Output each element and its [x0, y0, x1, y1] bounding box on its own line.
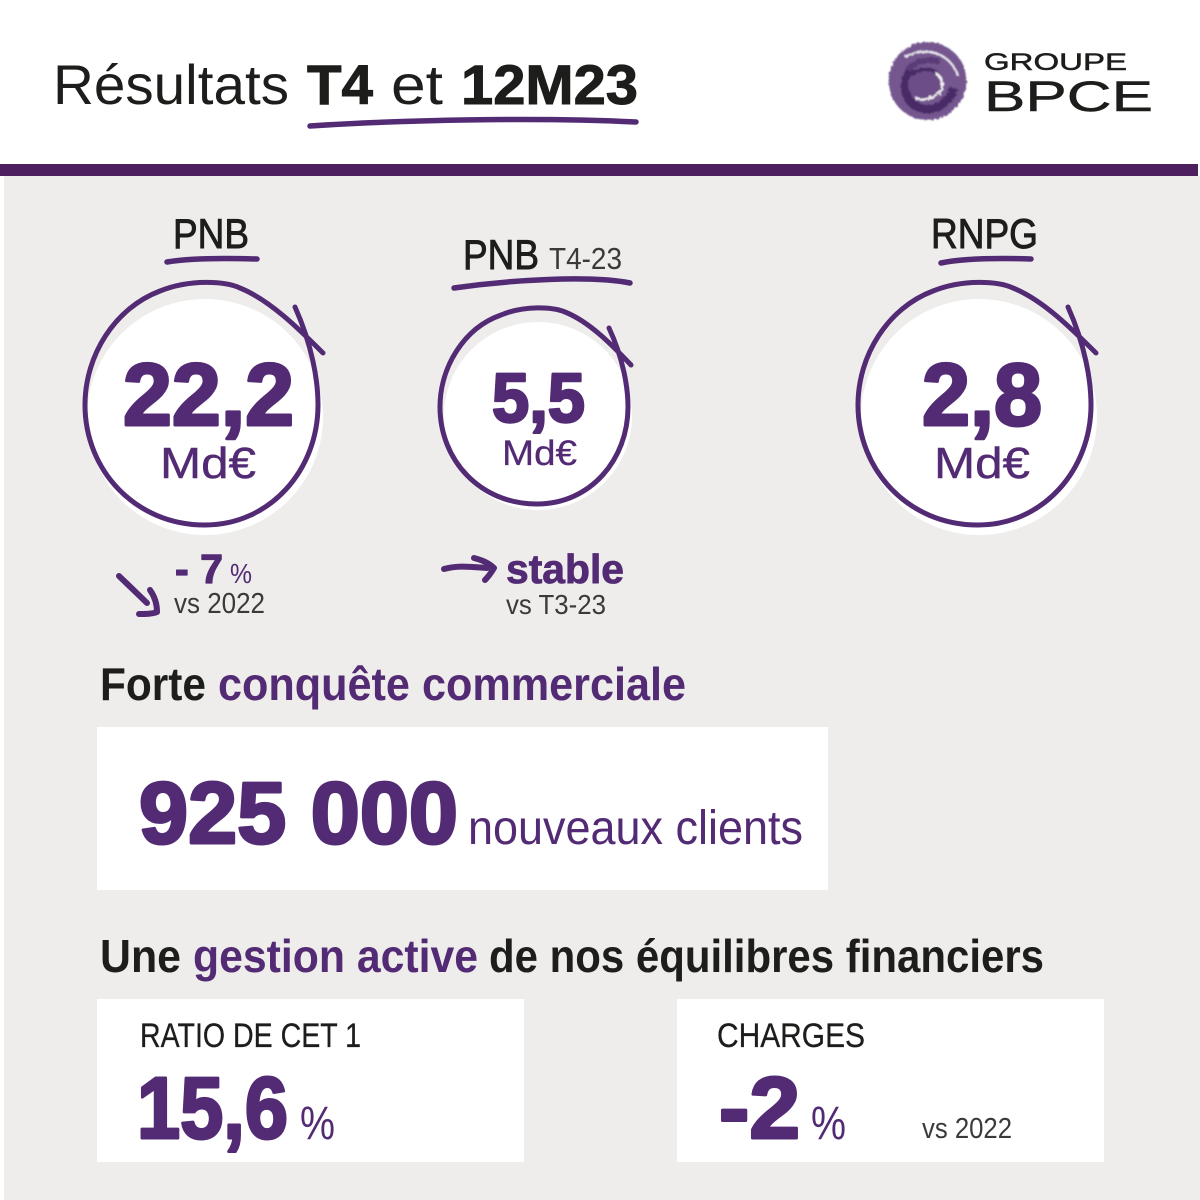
title	[53, 53, 638, 126]
change: -7 % vs 2022	[119, 546, 265, 620]
title: 12M23	[461, 53, 638, 116]
heading: Une gestion active: de nos équilibres financiers	[489, 930, 1044, 982]
circle: 5,5 Md€: Md€	[502, 434, 577, 473]
title: T4	[307, 53, 373, 116]
title: Résultats	[53, 53, 289, 116]
panel: RNPG	[858, 210, 1097, 535]
heading: PNB T4-23: T4-23	[549, 241, 622, 276]
panel: charges: vs 2022	[922, 1113, 1012, 1145]
change: stable vs T3-23	[444, 546, 624, 620]
circle: 5,5 Md€: 5,5	[492, 359, 585, 437]
circle: 2,8 Md€	[858, 282, 1097, 535]
heading: Une gestion active: gestion active	[193, 930, 478, 982]
heading: Forte conquête commerciale: conquête commerciale	[218, 658, 686, 710]
panel: ratio de CET 1: %	[300, 1096, 335, 1149]
circle: 2,8 Md€: 2,8	[922, 345, 1042, 444]
panel: nouveaux clients: nouveaux clients	[468, 802, 803, 855]
circle: 22,2 Md€	[85, 282, 323, 535]
heading: Une gestion active	[100, 930, 1044, 982]
panel: ratio de CET 1: RATIO DE CET 1	[140, 1017, 361, 1055]
panel: nouveaux clients	[97, 727, 828, 890]
heading: PNB T4-23: PNB	[463, 231, 539, 278]
panel: charges: -2	[719, 1060, 800, 1157]
panel: PNB annual	[85, 210, 323, 620]
heading: PNB T4-23	[454, 231, 630, 288]
logo: Groupe BPCE: BPCE	[984, 73, 1153, 121]
panel: nouveaux clients: 925 000	[139, 765, 458, 862]
heading: Forte conquête commerciale: Forte	[100, 658, 206, 710]
panel: charges	[677, 999, 1104, 1162]
panel: ratio de CET 1: 15,6	[137, 1060, 288, 1157]
change: -7 % vs 2022: - 7	[175, 546, 223, 592]
circle: 22,2 Md€: 22,2	[123, 345, 294, 444]
title: et	[391, 53, 443, 116]
change: -7 % vs 2022: %	[230, 558, 252, 589]
logo: Groupe BPCE: GROUPE	[984, 49, 1127, 76]
circle: 2,8 Md€: Md€	[934, 439, 1030, 488]
change: -7 % vs 2022: vs 2022	[174, 588, 265, 620]
heading: RNPG: RNPG	[931, 210, 1038, 257]
circle: 22,2 Md€: Md€	[160, 439, 256, 488]
heading: Une gestion active: Une	[100, 930, 181, 982]
logo: Groupe BPCE	[888, 42, 1153, 121]
change: stable vs T3-23: vs T3-23	[506, 589, 606, 620]
change: stable vs T3-23: stable	[506, 546, 624, 592]
circle: 5,5 Md€	[440, 308, 632, 510]
panel: PNB T4-23	[440, 231, 632, 620]
heading: PNB: PNB	[173, 210, 249, 257]
panel: charges: %	[811, 1096, 846, 1149]
panel: charges: CHARGES	[717, 1017, 865, 1055]
panel: ratio de CET 1	[97, 999, 524, 1162]
